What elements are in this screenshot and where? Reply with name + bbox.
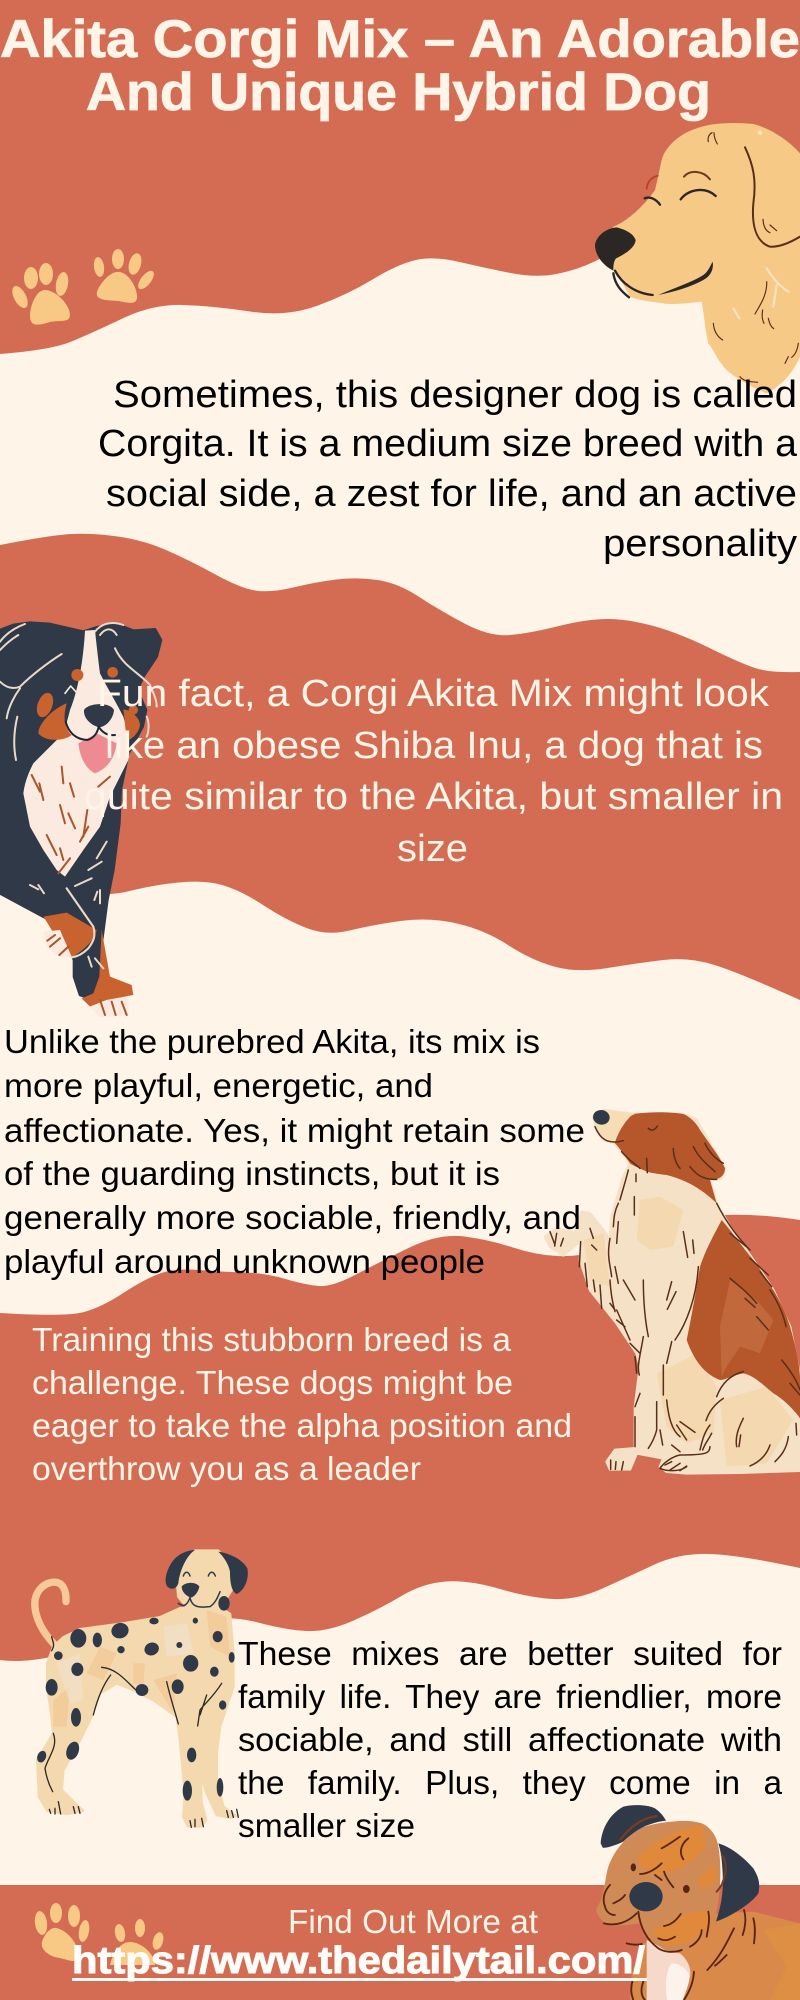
text block: designer dog intro: social side, a zest for life, and an active bbox=[106, 473, 797, 515]
text block: training: eager to take the alpha position and bbox=[32, 1407, 572, 1444]
text block: designer dog intro: Sometimes, this designer dog is called bbox=[113, 374, 797, 416]
text block: training: overthrow you as a leader bbox=[32, 1450, 421, 1487]
text block: family life: sociable, and still affectionate with bbox=[238, 1721, 782, 1758]
footer call to action: https://www.thedailytail.com/ bbox=[72, 1940, 645, 1982]
icon: paw prints top left bbox=[9, 249, 157, 325]
panel: footer band bbox=[0, 1885, 800, 2000]
title: Akita Corgi Mix – An Adorable bbox=[0, 10, 800, 69]
text block: training: challenge. These dogs might be bbox=[32, 1364, 513, 1401]
text block: fun fact bbox=[84, 673, 783, 870]
text block: playful temperament: Unlike the purebred Akita, its mix is bbox=[4, 1023, 540, 1060]
text block: playful temperament: affectionate. Yes, it might retain some bbox=[4, 1112, 585, 1149]
panel: second terracotta wave bbox=[0, 534, 800, 1000]
text block: fun fact: Fun fact, a Corgi Akita Mix might look bbox=[97, 673, 770, 715]
icon: paw prints footer bbox=[33, 1903, 165, 1965]
text block: family life: smaller size bbox=[238, 1807, 415, 1844]
text block: family life: These mixes are better suited for bbox=[238, 1635, 782, 1672]
text block: fun fact: like an obese Shiba Inu, a dog that is bbox=[105, 725, 763, 767]
icon: bernese dog bbox=[0, 623, 161, 1017]
icon: sitting dog bbox=[545, 1109, 800, 1473]
text block: fun fact: size bbox=[397, 828, 468, 870]
title bbox=[0, 10, 800, 122]
text block: training: Training this stubborn breed is a bbox=[32, 1321, 512, 1358]
text block: designer dog intro: personality bbox=[603, 523, 797, 565]
text block: playful temperament: more playful, energetic, and bbox=[4, 1067, 433, 1104]
panel: top terracotta wave bbox=[0, 0, 800, 354]
footer call to action: Find Out More at bbox=[288, 1903, 538, 1940]
text block: designer dog intro: Corgita. It is a medium size breed with a bbox=[98, 423, 798, 465]
icon: orange dog bottom right bbox=[596, 1805, 800, 2000]
text block: family life: family life. They are friendlier, more bbox=[238, 1678, 782, 1715]
footer call to action bbox=[72, 1903, 647, 1982]
text block: family life: the family. Plus, they come in a bbox=[238, 1764, 783, 1801]
text block: playful temperament: playful around unknown people bbox=[4, 1243, 485, 1280]
icon: golden dog head bbox=[595, 123, 800, 393]
text block: playful temperament: generally more sociable, friendly, and bbox=[4, 1199, 581, 1236]
title: And Unique Hybrid Dog bbox=[86, 63, 711, 122]
text block: training bbox=[32, 1321, 572, 1487]
text block: designer dog intro bbox=[98, 374, 798, 565]
text block: fun fact: quite similar to the Akita, but smaller in bbox=[84, 776, 783, 818]
panel: third terracotta wave bbox=[0, 1215, 800, 1661]
text block: playful temperament: of the guarding instincts, but it is bbox=[4, 1155, 500, 1192]
text block: family life bbox=[238, 1635, 783, 1844]
icon: dalmatian dog bbox=[35, 1550, 248, 1827]
text block: playful temperament bbox=[4, 1023, 585, 1280]
